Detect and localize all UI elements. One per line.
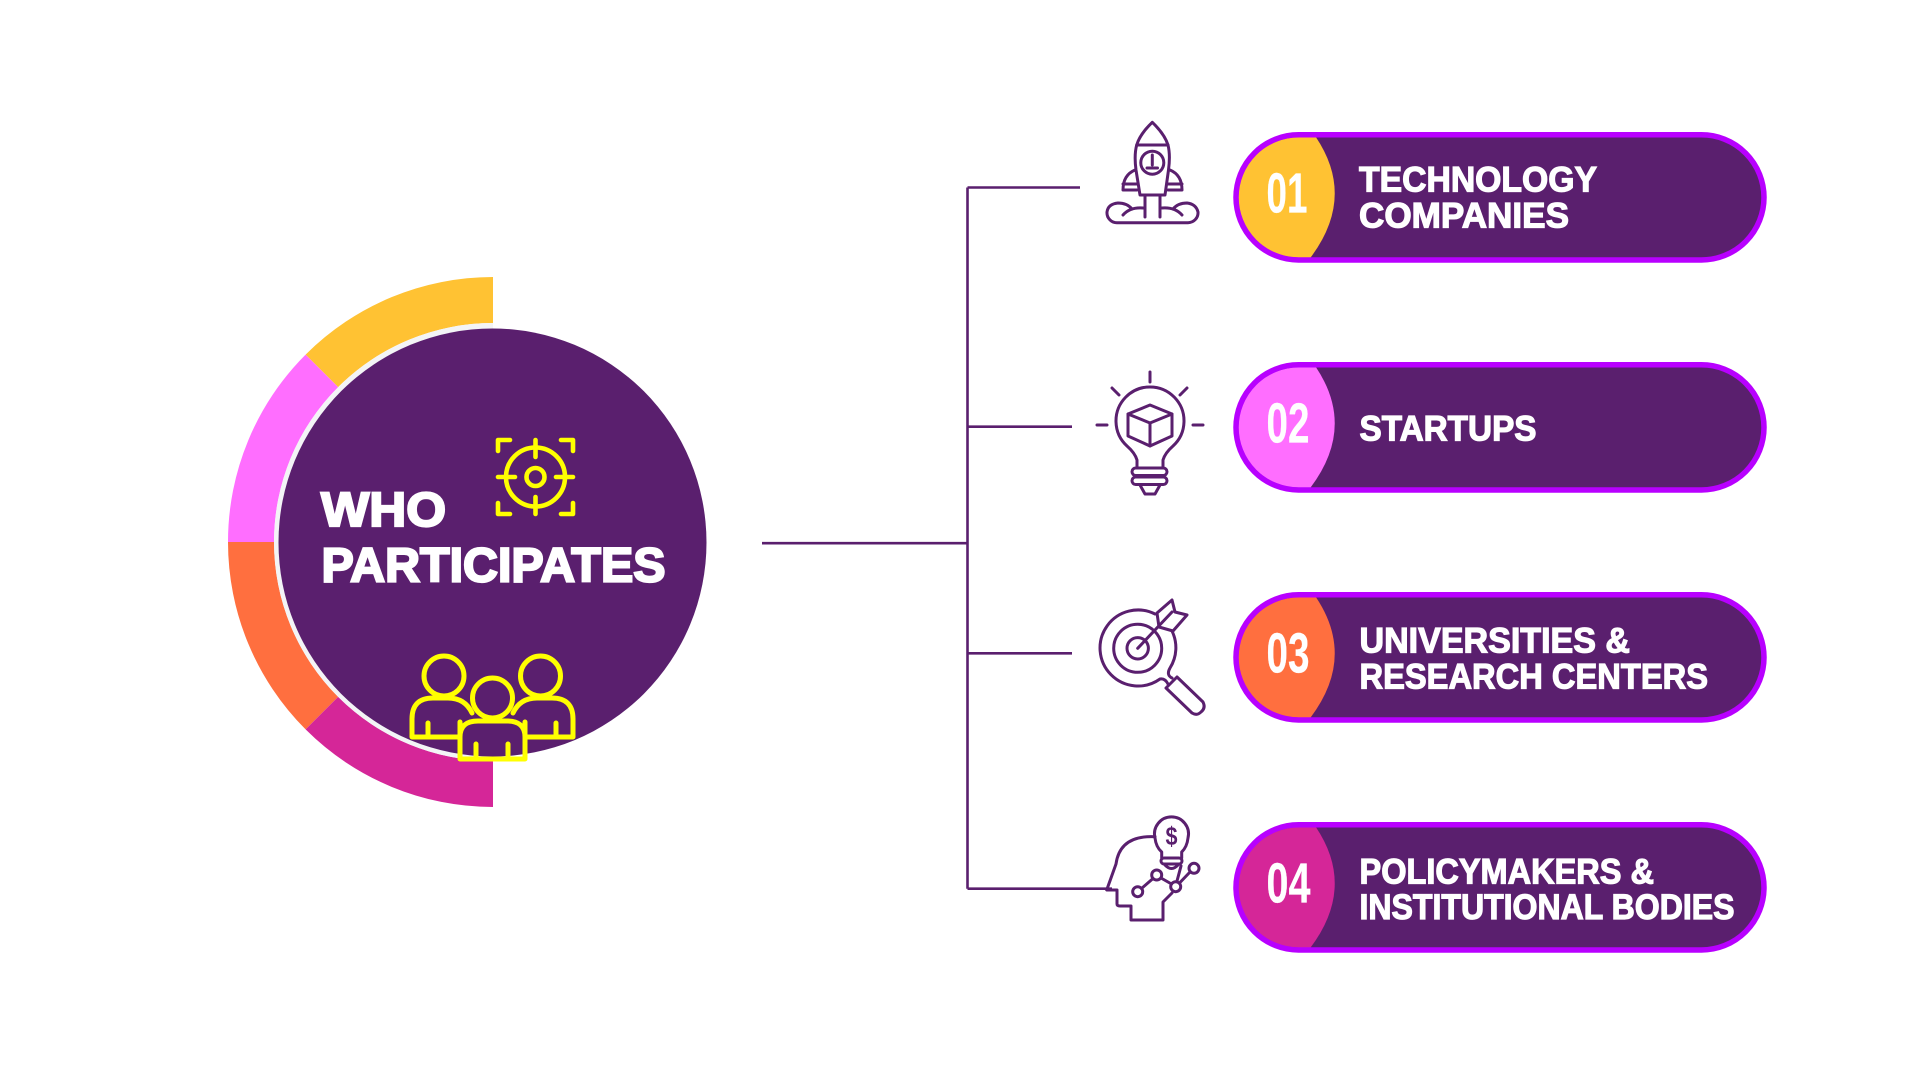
label <box>1360 621 1708 696</box>
label: TECHNOLOGY <box>1359 161 1597 200</box>
label: STARTUPS <box>1360 410 1536 449</box>
heading: who participates <box>321 484 666 592</box>
ring segment: orange <box>228 542 338 729</box>
panel: 02 startups <box>1236 365 1764 490</box>
dollar sign: $ <box>1166 821 1178 851</box>
number cap <box>1238 367 1335 488</box>
label <box>1359 161 1597 235</box>
label: RESEARCH CENTERS <box>1360 657 1708 696</box>
panel: 01 technology companies <box>1236 135 1764 260</box>
pill background <box>1236 365 1764 490</box>
icon: target and magnifier <box>1100 600 1204 714</box>
number: 04 <box>1266 852 1311 916</box>
connector lines <box>762 188 1112 889</box>
icon: group of people <box>412 656 573 759</box>
number cap <box>1238 827 1335 948</box>
label <box>1360 852 1734 927</box>
label: POLICYMAKERS & <box>1360 852 1654 891</box>
ring segment: yellow <box>306 277 493 387</box>
panel: 03 universities and research centers <box>1236 595 1764 720</box>
number: 02 <box>1266 392 1310 456</box>
ring segment: pink <box>228 355 338 542</box>
number cap <box>1238 137 1335 258</box>
number: 01 <box>1266 162 1308 226</box>
label: COMPANIES <box>1359 196 1569 235</box>
pill border <box>1236 825 1764 950</box>
pill background <box>1236 595 1764 720</box>
panel: 04 policymakers and institutional bodies <box>1236 825 1764 950</box>
icon: rocket <box>1107 122 1198 223</box>
hub outline <box>274 323 493 761</box>
label: INSTITUTIONAL BODIES <box>1360 888 1734 927</box>
ring segment: magenta <box>306 697 493 807</box>
number: 03 <box>1266 622 1310 686</box>
hub circle <box>278 328 706 756</box>
icon: idea bulb with cube <box>1097 372 1203 494</box>
panel: central hub <box>228 277 706 807</box>
pill background <box>1236 825 1764 950</box>
icon: head with dollar bulb and trend line <box>1107 817 1199 920</box>
icon: crosshair target <box>498 440 573 514</box>
label: UNIVERSITIES & <box>1360 621 1630 660</box>
pill background <box>1236 135 1764 260</box>
pill border <box>1236 135 1764 260</box>
heading: who participates: WHO <box>321 484 446 537</box>
heading: who participates: PARTICIPATES <box>322 540 666 592</box>
pill border <box>1236 595 1764 720</box>
number cap <box>1238 597 1335 718</box>
pill border <box>1236 365 1764 490</box>
